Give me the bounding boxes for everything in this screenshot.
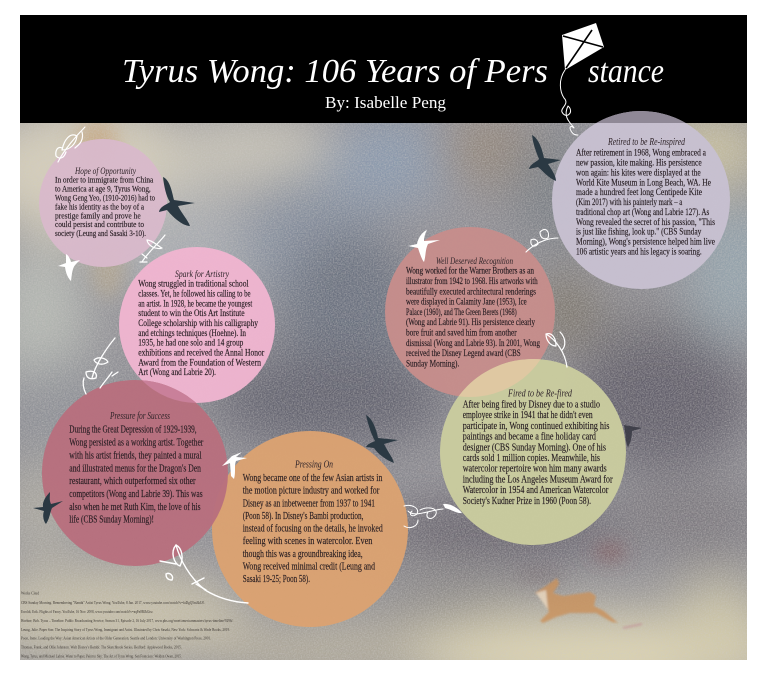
- text: Spark for Artistry body: College scholarship with his calligraphy: [138, 318, 258, 328]
- heading: Pressing On: Pressing On: [294, 460, 333, 471]
- text: Well Deserved Recognition body: dismissal (Wong and Labrie 93). In 2001, Wong: [406, 338, 540, 349]
- panel: Well Deserved Recognition: [385, 227, 555, 397]
- text: Fired to be Re-fired body: designer (CBS Sunday Morning). One of his: [463, 442, 606, 453]
- text: Well Deserved Recognition body: [406, 266, 540, 369]
- text: Spark for Artistry body: Wong struggled in traditional school: [138, 279, 249, 289]
- icon: dark crane near Retired: [529, 135, 561, 181]
- text: Hope of Opportunity body: [55, 175, 155, 238]
- text: Pressing On body: feeling with scenes in watercolor. Even: [243, 535, 373, 547]
- text: Well Deserved Recognition body: received the Disney Legend award (CBS: [406, 348, 521, 359]
- icon: deer: [535, 578, 642, 628]
- text: Pressing On body: Wong became one of the few Asian artists in: [243, 472, 383, 484]
- text: works cited: Hoehne, Bob. Tyrus – Timeline. Public Broadcasting Service, Season 31, Episode 2, 16 July 2017, www.pbs.org/wnet/americanmasters/tyrus-timeline/9296/.: [21, 619, 233, 624]
- icon: white bird near Hope: [58, 254, 80, 281]
- text: Pressure for Success body: with his artist friends, they painted a mural: [69, 449, 202, 461]
- icon: dark crane near Pressure: [33, 492, 63, 524]
- text: Pressing On body: Wong received minimal credit (Leung and: [243, 560, 375, 572]
- icon: dark crane near Hope: [159, 177, 195, 226]
- heading: Pressure for Success: Pressure for Success: [109, 411, 170, 422]
- text: Retired to be Re-inspired body: Morning), Wong's persistence helped him live: [576, 236, 715, 246]
- text: Well Deserved Recognition body: (Wong and Labrie 91). His persistence clearly: [406, 317, 535, 328]
- panel: Retired to be Re-inspired: [552, 111, 730, 289]
- text: Pressure for Success body: also when he met Ruth Kim, the love of his: [69, 501, 201, 513]
- text: Hope of Opportunity body: Wong Geng Yeo, (1910-2016) had to: [55, 192, 155, 202]
- text: Fired to be Re-fired body: [463, 399, 613, 507]
- text: Well Deserved Recognition body: Palace (1960), and The Green Berets (1968): [406, 307, 517, 318]
- icon: flower doodle below Hope: [140, 235, 165, 262]
- text: Pressing On body: (Poon 58). In Disney's Bambi production,: [243, 510, 364, 522]
- panel: Spark for Artistry: [119, 247, 275, 403]
- text: works cited: Thomas, Frank, and Ollie Johnston. Walt Disney's Bambi: The Sketchbook Series. Bedford: Applewood Books, 2015.: [21, 646, 182, 650]
- text: Retired to be Re-inspired body: is just like fishing, look up." (CBS Sunday: [576, 227, 702, 237]
- text: Pressing On body: Disney as an inbetweener from 1937 to 1941: [243, 497, 375, 509]
- text: Hope of Opportunity body: society (Leung and Sasaki 3-10).: [55, 228, 146, 238]
- panel: Pressure for Success: [42, 380, 228, 566]
- text: Hope of Opportunity body: In order to immigrate from China: [55, 175, 153, 185]
- text: Fired to be Re-fired body: including the Los Angeles Museum Award for: [463, 474, 613, 486]
- text: Well Deserved Recognition body: Sunday Morning).: [406, 358, 459, 369]
- text: Pressing On body: the motion picture industry and worked for: [243, 485, 380, 497]
- text: works cited: Leung, Julie. Paper Son: The Inspiring Story of Tyrus Wong, Immigrant and Artist. Illustrated by Chris Sasaki, New York: Schwartz & Wade Books, 2019.: [21, 628, 230, 633]
- icon: white stroke by Fired: [443, 504, 462, 513]
- icon: flower doodle lower right of Well: [546, 332, 567, 367]
- icon: white bird between Pressure and Pressing: [222, 452, 247, 479]
- text: Fired to be Re-fired body: After being fired by Disney due to a studio: [463, 399, 600, 410]
- text: Fired to be Re-fired body: watercolor repertoire won him many awards: [463, 464, 607, 475]
- title: Tyrus Wong: 106 Years of Pers: [122, 53, 548, 90]
- text: Fired to be Re-fired body: paintings and became a fine holiday card: [463, 432, 596, 442]
- icon: dark crane near Pressing On: [366, 415, 398, 463]
- text: Well Deserved Recognition body: were displayed in Calamity Jane (1953), Ice: [406, 297, 527, 308]
- text: Well Deserved Recognition body: bore fruit and saved him from another: [406, 328, 517, 338]
- text: works cited: Ewoldt, Erik. Flights of Fancy. YouTube, 16 Nov. 2008, www.youtube.com/watch?v=aqFn8RJkGiw.: [21, 610, 153, 615]
- icon: white bird near Well: [408, 230, 440, 262]
- heading: Well Deserved Recognition: Well Deserved Recognition: [436, 257, 513, 267]
- text: Fired to be Re-fired body: employee strike in 1941 that he didn't even: [463, 410, 593, 421]
- icon: string doodle between Pressing and Fired: [404, 505, 443, 528]
- text: Retired to be Re-inspired body: After retirement in 1968, Wong embraced a: [576, 148, 706, 158]
- text: Pressure for Success body: competitors (Wong and Labrie 39). This was: [69, 488, 203, 500]
- icon: faint crane right of Fired: [624, 425, 642, 447]
- text: Pressure for Success body: restaurant, which outperformed six other: [69, 475, 196, 487]
- text: Spark for Artistry body: exhibitions and received the Annal Honor: [138, 348, 264, 358]
- panel: Hope of Opportunity: [39, 139, 167, 267]
- text: Pressure for Success body: During the Great Depression of 1929-1939,: [69, 424, 197, 436]
- text: Retired to be Re-inspired body: Wong revealed the secret of his passion, "This: [576, 217, 715, 227]
- text: Hope of Opportunity body: fake his identity as the boy of a: [55, 201, 144, 211]
- text: works cited: Works Cited: [21, 592, 39, 596]
- icon: flower doodle above Pressure: [83, 338, 118, 394]
- text: works cited: Poon, Irene. Leading the Way: Asian American Artists of the Older Generation. Seattle and London: University of Washington Press, 2001.: [21, 636, 211, 642]
- text: works cited: Wong, Tyrus, and Michael Labrie. Water to Paper, Paint to Sky: The Art of Tyrus Wong. San Francisco: Weldon Owen, 2015.: [21, 654, 182, 660]
- icon: flower doodle top right of Well: [526, 230, 558, 252]
- text: Spark for Artistry body: [138, 279, 264, 377]
- text: Pressing On body: Sasaki 19-25; Poon 58).: [243, 573, 310, 585]
- heading: Fired to be Re-fired: Fired to be Re-fired: [507, 389, 573, 400]
- heading: Hope of Opportunity: Hope of Opportunity: [74, 166, 136, 176]
- text: Fired to be Re-fired body: Society's Kudner Prize in 1960 (Poon 58).: [463, 496, 591, 507]
- heading: Spark for Artistry: Spark for Artistry: [175, 269, 230, 280]
- icon: flower doodle below Pressure: [160, 545, 248, 603]
- text: Spark for Artistry body: student to win the Otis Art Institute: [138, 308, 245, 318]
- panel: Fired to be Re-fired: [440, 359, 626, 545]
- panel: Pressing On: [212, 431, 408, 627]
- text: Spark for Artistry body: Art (Wong and Labrie 20).: [138, 367, 216, 377]
- text: Retired to be Re-inspired body: won again: his kites were displayed at the: [576, 167, 701, 177]
- title: stance: [588, 53, 664, 90]
- text: Hope of Opportunity body: prestige family and prove he: [55, 210, 141, 220]
- heading: Retired to be Re-inspired: Retired to be Re-inspired: [607, 137, 686, 148]
- text: Spark for Artistry body: classes. Yet, he followed his calling to be: [138, 288, 251, 298]
- text: Retired to be Re-inspired body: World Kite Museum in Long Beach, WA. He: [576, 177, 711, 187]
- text: Hope of Opportunity body: to America at age 9, Tyrus Wong,: [55, 184, 151, 194]
- header band: [20, 15, 747, 123]
- text: Retired to be Re-inspired body: new passion, kite making. His persistence: [576, 158, 702, 168]
- text: Retired to be Re-inspired body: (Kim 2017) with his painterly mark – a: [576, 197, 682, 207]
- text: Retired to be Re-inspired body: [576, 148, 715, 256]
- text: Well Deserved Recognition body: illustrator from 1942 to 1968. His artworks with: [406, 276, 538, 287]
- text: Spark for Artistry body: Award from the Foundation of Western: [138, 357, 261, 367]
- text: Spark for Artistry body: an artist. In 1928, he became the youngest: [138, 298, 253, 308]
- text: works cited: [21, 592, 233, 660]
- text: Fired to be Re-fired body: cards sold 1 million copies. Meanwhile, his: [463, 453, 600, 464]
- text: Pressure for Success body: and illustrated menus for the Dragon's Den: [69, 462, 201, 474]
- text: Pressing On body: though this was a groundbreaking idea,: [243, 548, 363, 560]
- subtitle: author: By: Isabelle Peng: [325, 93, 447, 112]
- text: Fired to be Re-fired body: Watercolor in 1954 and American Watercolor: [463, 485, 609, 496]
- text: Spark for Artistry body: 1935, he had one solo and 14 group: [138, 338, 244, 348]
- text: Hope of Opportunity body: could persist and contribute to: [55, 219, 144, 229]
- text: Spark for Artistry body: and etchings techniques (Hoehne). In: [138, 328, 246, 338]
- text: Pressure for Success body: Wong persisted as a working artist. Together: [69, 437, 204, 449]
- text: Pressure for Success body: [69, 424, 204, 526]
- text: Pressing On body: instead of focusing on the details, he invoked: [243, 522, 383, 534]
- icon: kite: [560, 23, 604, 135]
- text: Pressing On body: [243, 472, 383, 585]
- text: Retired to be Re-inspired body: made a hundred feet long Centipede Kite: [576, 187, 702, 197]
- text: Well Deserved Recognition body: beautifully executed architectural renderings: [406, 286, 536, 297]
- panel: watercolor background: [20, 111, 747, 660]
- text: Retired to be Re-inspired body: traditional chop art (Wong and Labrie 127). As: [576, 207, 710, 217]
- text: Retired to be Re-inspired body: 106 artistic years and his legacy is soaring.: [576, 246, 702, 256]
- text: Pressure for Success body: life (CBS Sunday Morning)!: [69, 514, 154, 526]
- text: Well Deserved Recognition body: Wong worked for the Warner Brothers as an: [406, 266, 534, 277]
- text: Fired to be Re-fired body: participate in, Wong continued exhibiting his: [463, 421, 609, 432]
- icon: flower doodle top of Hope: [56, 127, 85, 162]
- text: works cited: CBS Sunday Morning. Remembering "Bambi" Artist Tyrus Wong. YouTube, 8 Jan. 2017, www.youtube.com/watch?v=faDgQ5m3kU0.: [21, 601, 205, 606]
